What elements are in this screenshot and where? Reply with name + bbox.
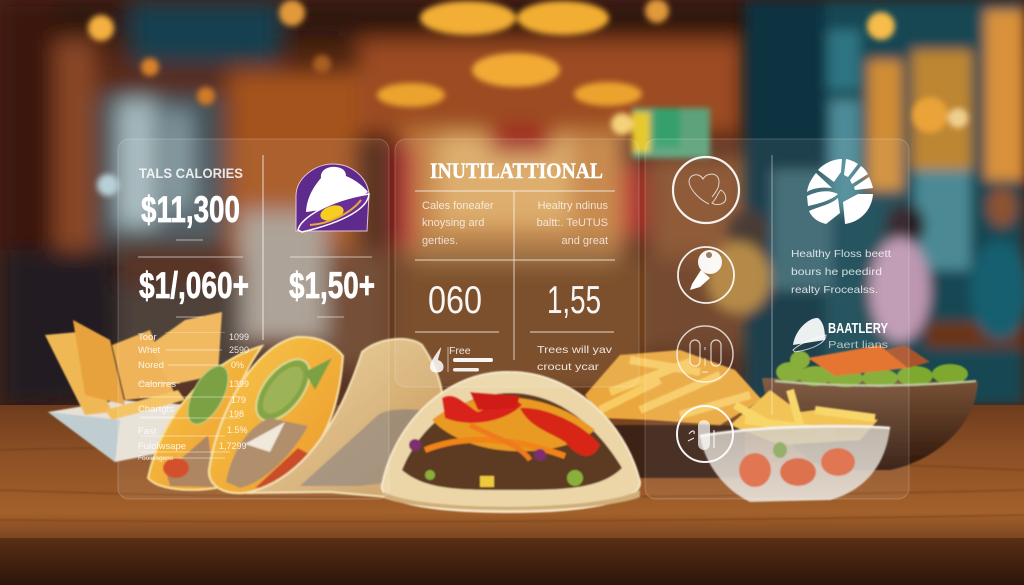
label: plant items: Paert lians: [828, 339, 888, 351]
nutrition table: Chartgts: [138, 404, 174, 415]
icon: tool circle: [678, 247, 734, 303]
nutrition table: Whet: [138, 345, 161, 356]
text block: trees note: crocut ycar: [537, 361, 600, 373]
panel: middle glass panel: [395, 139, 639, 387]
text block: right description: baltt:. TeUTUS: [537, 217, 608, 229]
icon: digital display circle: [677, 326, 733, 382]
nutrition table: Fast: [138, 426, 157, 437]
text block: right description: [537, 200, 608, 247]
nutrition table: 1099: [229, 332, 249, 342]
icon: white sun-stripe logo: [807, 159, 873, 224]
food: salad bowl: [762, 345, 978, 470]
panel: right glass panel: [645, 139, 909, 499]
text block: left description: gerties.: [422, 235, 458, 247]
panel: left glass panel: [118, 139, 389, 499]
nutrition table: 198: [229, 409, 244, 419]
icon: small bell logo: [793, 318, 826, 352]
text block: healthy description: Healthy Floss beett: [791, 248, 891, 260]
nutrition table: 2590: [229, 345, 249, 355]
text block: healthy description: [791, 248, 891, 296]
heading: total calories: TALS CALORIES: [139, 166, 243, 181]
text block: healthy description: realty Frocealss.: [791, 284, 878, 296]
food: two yellow tacos and soft taco: [148, 337, 443, 500]
label: battery brand: BAATLERY: [828, 320, 888, 337]
nutrition table: Calorires: [138, 379, 176, 390]
food: fries plate behind: [585, 350, 762, 478]
nutrition table: 1,7299: [219, 441, 247, 451]
text block: trees note: Trees will yav: [537, 344, 613, 356]
nutrition table: Fulolwsape: [138, 441, 186, 452]
stat: 1,55: 1,55: [547, 279, 601, 322]
text block: right description: and great: [562, 235, 608, 247]
nutrition table: 1399: [229, 379, 249, 389]
text block: healthy description: bours he peedird: [791, 266, 882, 278]
nutrition table: Toor: [138, 332, 156, 343]
heading: nutritional: INUTILATTIONAL: [430, 158, 603, 183]
nutrition table: 0%: [231, 360, 244, 370]
nutrition table: 179: [231, 395, 246, 405]
icon: heart circle: [673, 157, 739, 223]
stat: 060: 060: [428, 279, 482, 322]
text block: left description: Cales foneafer: [422, 200, 494, 212]
icon: purple bell logo: [296, 164, 369, 232]
nutrition table: Nored: [138, 360, 164, 371]
stat: 11,300: $11,300: [141, 189, 240, 230]
stat: 1.50: $1,50+: [289, 265, 375, 306]
nutrition table: 1.5%: [227, 425, 248, 435]
food: large stuffed pita taco: [382, 372, 640, 512]
text block: left description: knoysing ard: [422, 217, 484, 229]
food: glass bowl with fries: [700, 390, 890, 502]
icon: drop with free label: Free: [449, 345, 471, 357]
text block: left description: [422, 200, 494, 247]
icon: burrito circle: [677, 406, 733, 462]
wooden table: [0, 405, 1024, 585]
text block: trees note: [537, 344, 613, 373]
icon: drop with free label: [430, 345, 493, 372]
stat: 1,060: $1/,060+: [139, 265, 249, 306]
text block: right description: Healtry ndinus: [538, 200, 608, 212]
nutrition table: Fooliesgens: [138, 455, 174, 462]
nutrition table: [138, 332, 249, 462]
food: tortilla chips in paper tray: [45, 312, 222, 462]
